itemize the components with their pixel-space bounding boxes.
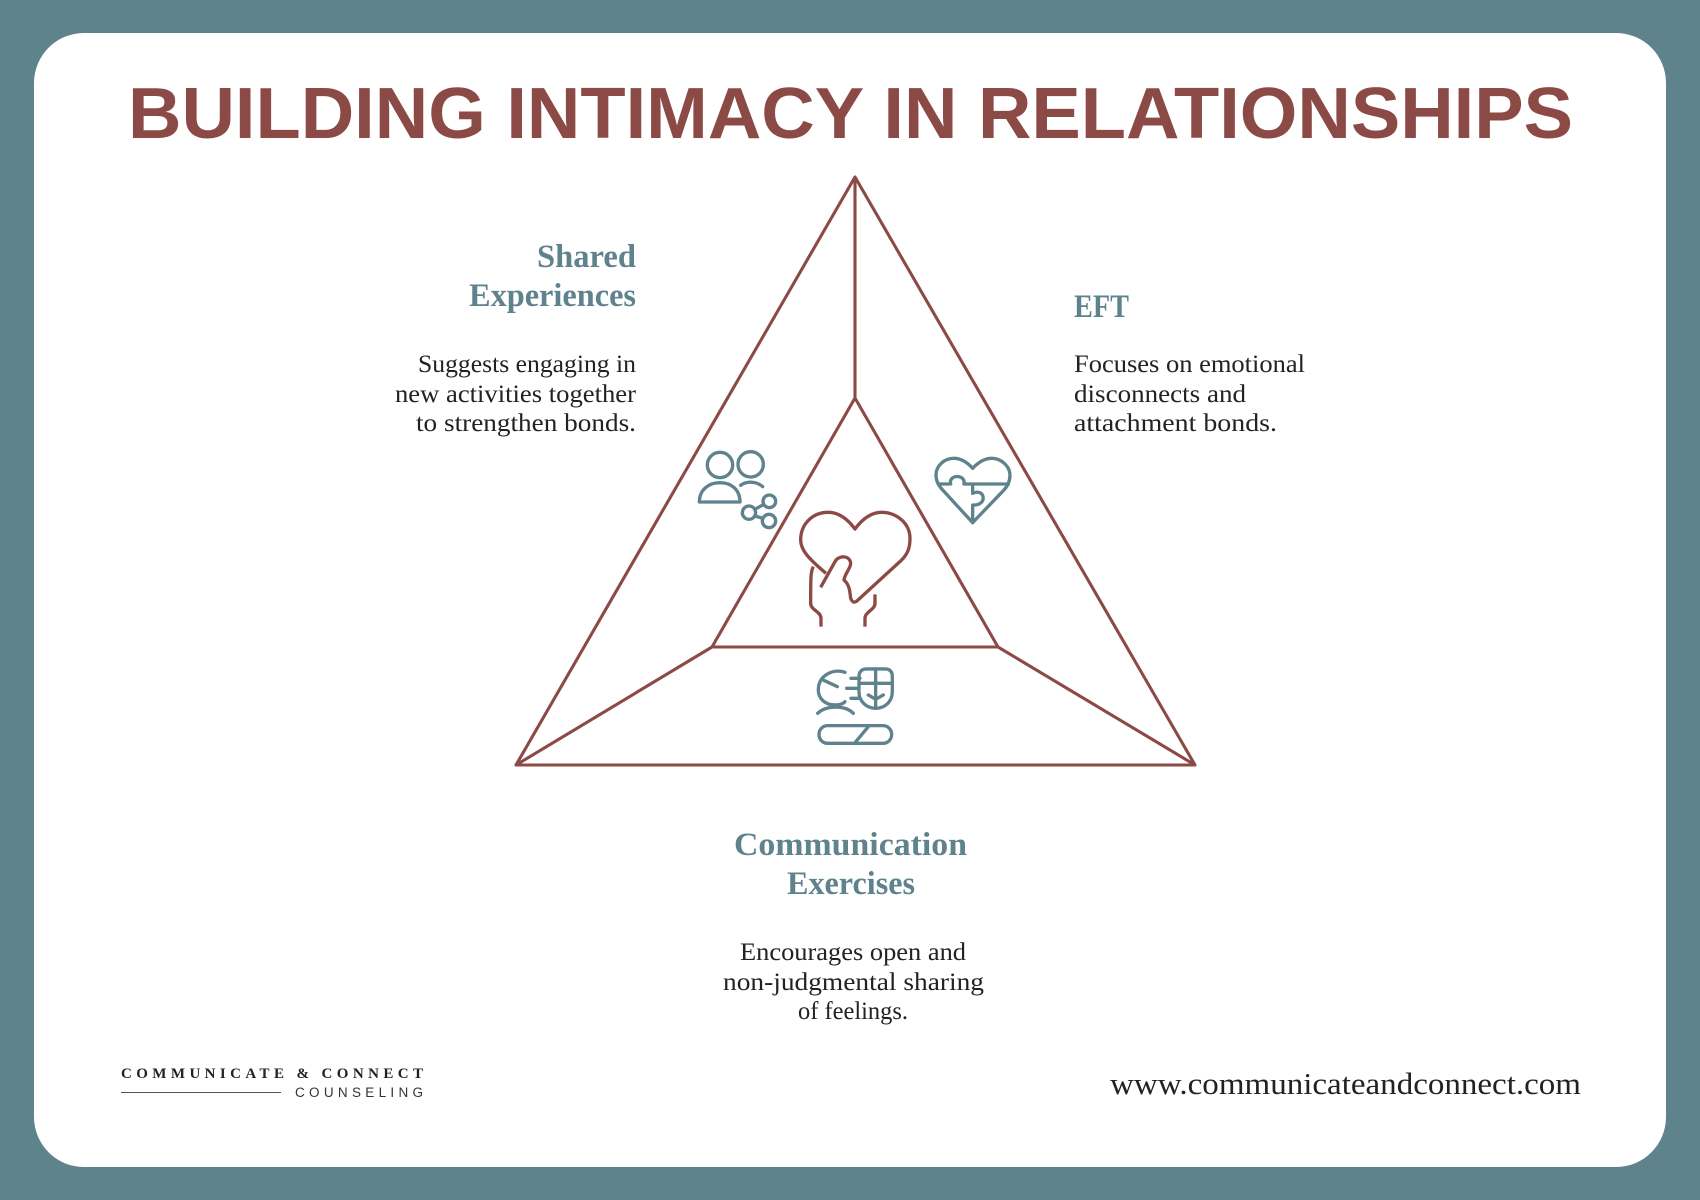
- text block: EFT: [1074, 289, 1305, 437]
- description: shared experiences: Suggests engaging in: [418, 351, 637, 378]
- description: communication exercises: non-judgmental sharing: [723, 969, 985, 996]
- website url: www.communicateandconnect.com: [1110, 1066, 1581, 1101]
- logo: COMMUNICATE & CONNECT: [121, 1066, 423, 1082]
- text block: shared experiences: [395, 239, 637, 437]
- description: EFT: disconnects and: [1074, 381, 1247, 408]
- description: communication exercises: Encourages open and: [740, 939, 967, 966]
- description: communication exercises: [723, 939, 985, 1025]
- triangle diagram: [516, 177, 1195, 765]
- description: shared experiences: [395, 351, 637, 437]
- description: shared experiences: to strengthen bonds.: [416, 410, 636, 437]
- description: EFT: Focuses on emotional: [1074, 351, 1305, 378]
- icon: people sharing: [699, 452, 776, 528]
- heading: EFT: EFT: [1074, 289, 1129, 325]
- heading: communication exercises: Exercises: [787, 866, 915, 902]
- title: BUILDING INTIMACY IN RELATIONSHIPS: [128, 74, 1573, 154]
- heading: communication exercises: Communication: [734, 827, 967, 863]
- description: shared experiences: new activities together: [395, 381, 637, 408]
- description: EFT: attachment bonds.: [1074, 410, 1277, 437]
- logo: COUNSELING: [295, 1085, 423, 1100]
- logo: [121, 1066, 423, 1100]
- heading: shared experiences: Shared: [537, 239, 636, 275]
- description: EFT: [1074, 351, 1305, 437]
- description: communication exercises: of feelings.: [798, 998, 908, 1025]
- heading: communication exercises: [734, 827, 967, 902]
- heading: shared experiences: Experiences: [469, 278, 636, 314]
- icon: puzzle heart: [936, 458, 1010, 523]
- icon: communication exercises: [818, 669, 892, 743]
- heading: shared experiences: [469, 239, 636, 314]
- text block: communication exercises: [723, 827, 985, 1025]
- icon: hand holding heart: [801, 512, 910, 627]
